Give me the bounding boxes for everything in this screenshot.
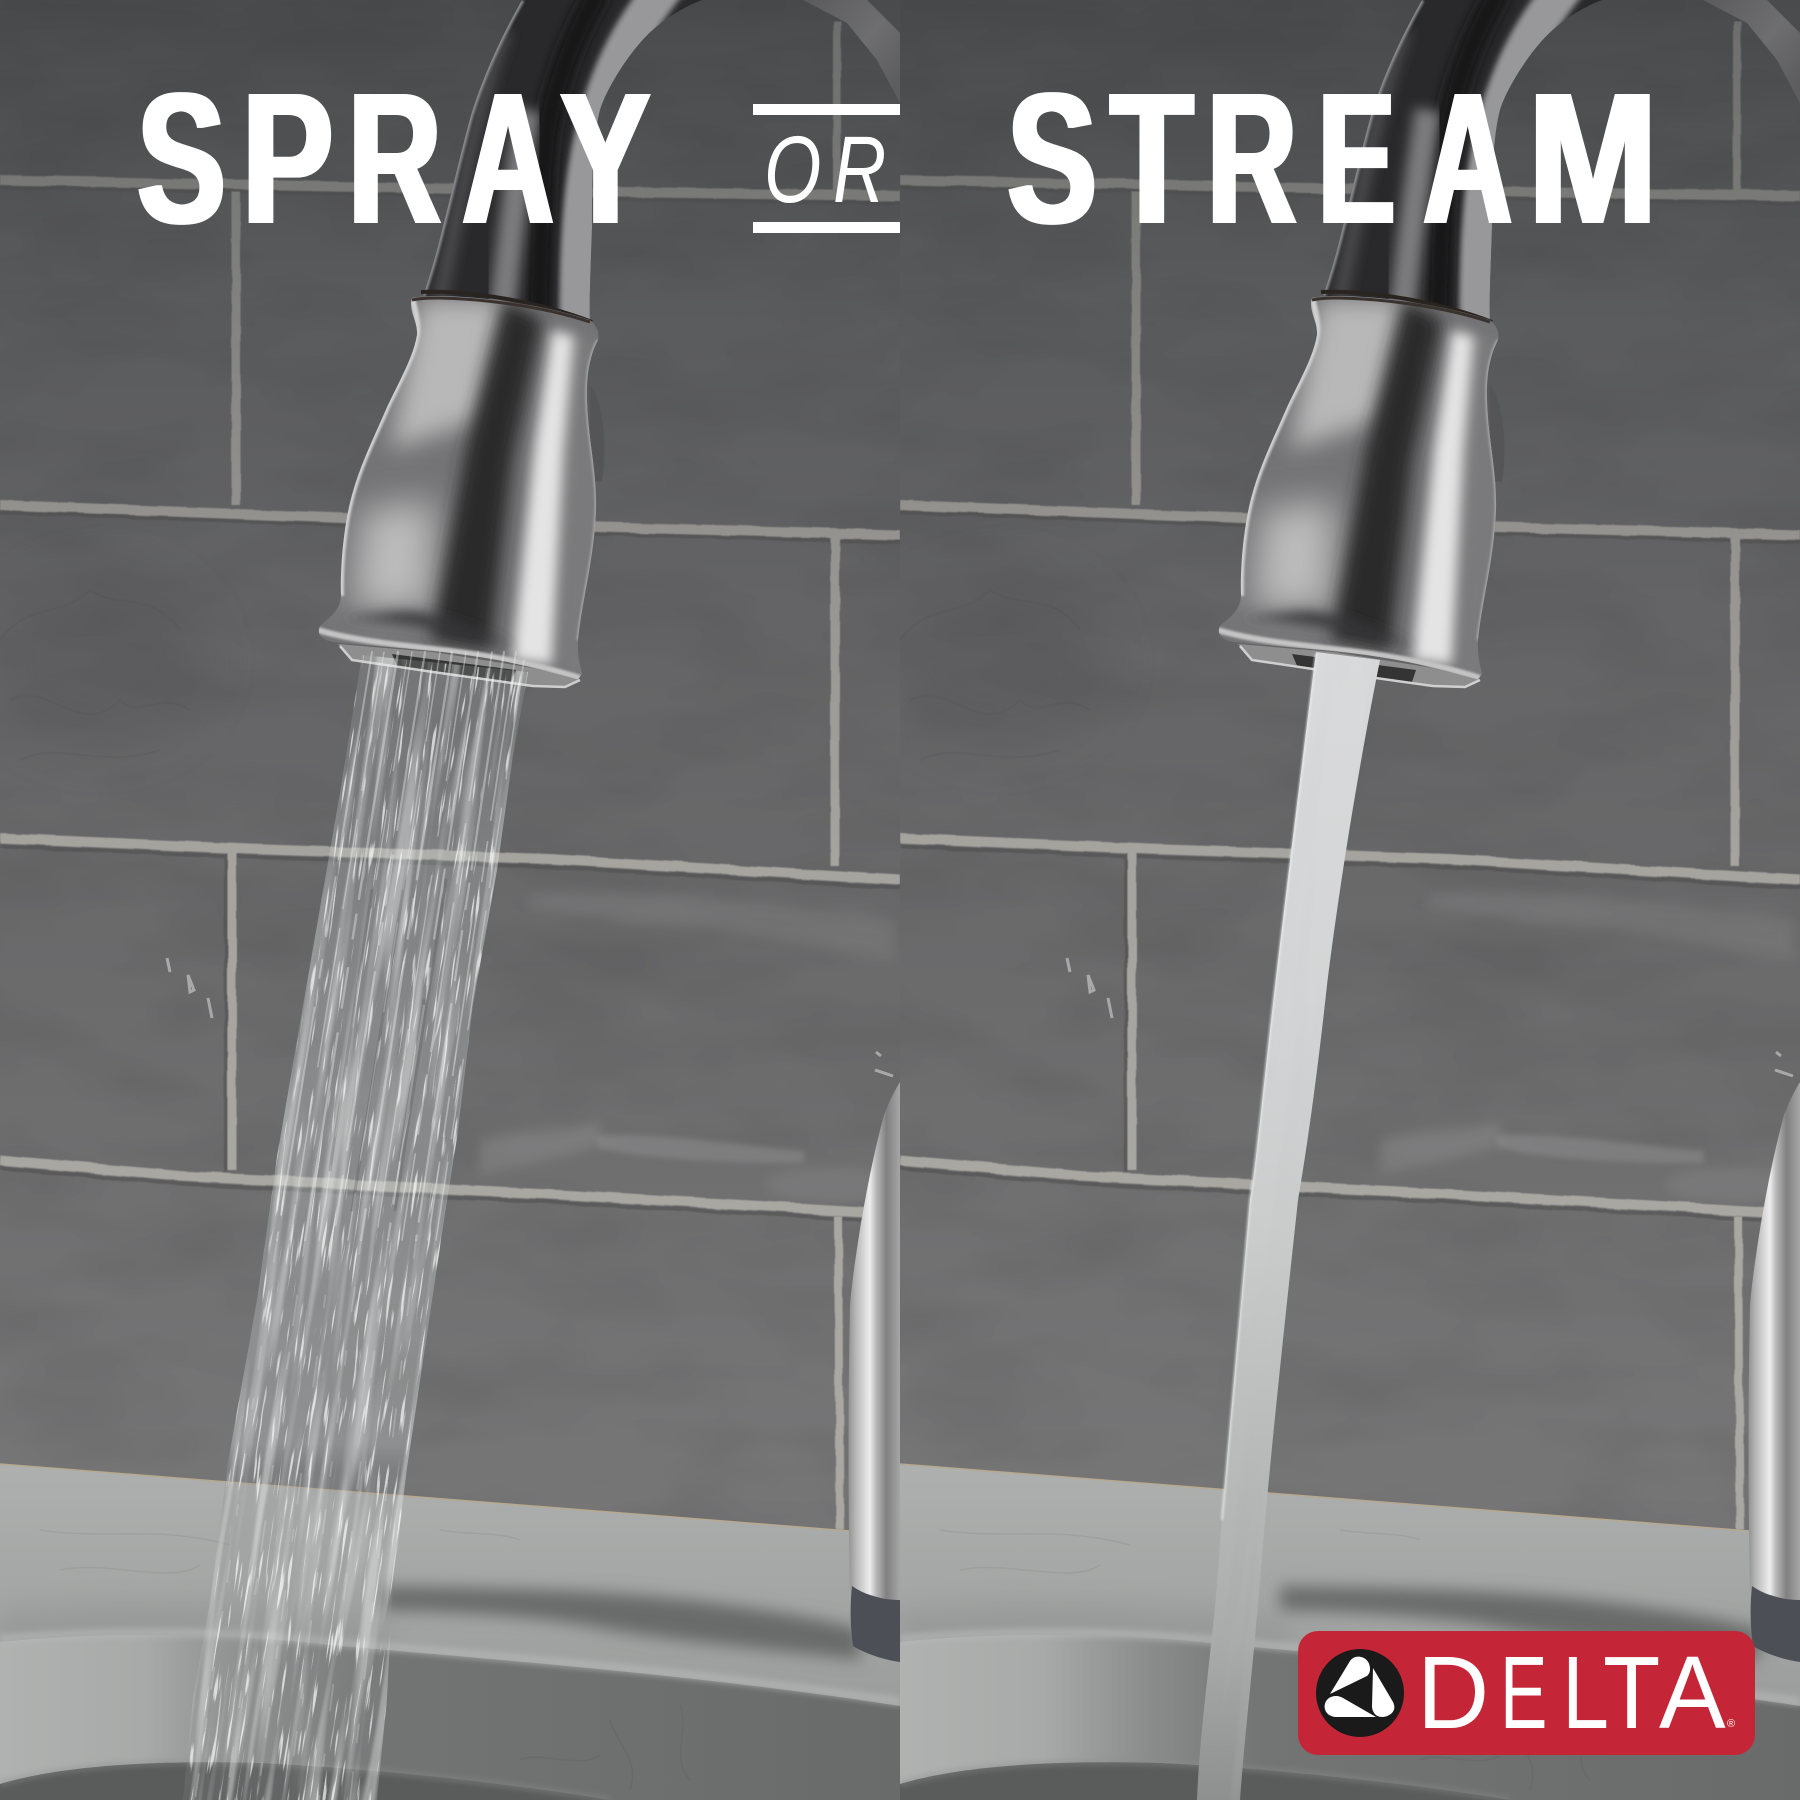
sink bowl [0, 1633, 900, 1800]
heading: spray: S [136, 53, 225, 263]
spray water [183, 650, 528, 1800]
heading: spray: R [348, 53, 441, 263]
faucet neck [421, 0, 900, 330]
logo wordmark [1417, 1635, 1735, 1750]
heading: stream: S [1006, 53, 1097, 263]
logo wordmark: L [1562, 1635, 1608, 1750]
or divider [753, 104, 900, 233]
heading: stream: E [1318, 53, 1395, 263]
faucet handle stem [848, 1082, 900, 1662]
heading: stream: A [1422, 53, 1512, 263]
logo wordmark: E [1500, 1635, 1547, 1750]
heading: spray [136, 53, 651, 263]
spray head nozzle [318, 296, 600, 690]
logo wordmark: A [1659, 1635, 1726, 1750]
logo wordmark: D [1417, 1635, 1489, 1750]
countertop [0, 1464, 900, 1800]
tile wall [0, 0, 900, 1800]
grout lines [0, 22, 900, 1530]
aerator [338, 644, 580, 687]
heading: stream: R [1207, 53, 1297, 263]
heading: stream: M [1528, 53, 1658, 263]
heading: spray: Y [560, 53, 650, 263]
spray head trigger [590, 385, 604, 482]
brand badge: Delta [1298, 1631, 1755, 1755]
stream water [1197, 652, 1380, 1800]
heading: stream: T [1110, 53, 1193, 263]
logo wordmark: ® [1727, 1718, 1735, 1730]
heading: stream [1006, 53, 1658, 263]
icon: Delta triangle mark [1316, 1649, 1404, 1737]
panel: spray [0, 0, 900, 1800]
logo wordmark: T [1603, 1635, 1660, 1750]
panel: stream [890, 0, 1800, 1800]
heading: spray: A [462, 53, 554, 263]
or divider: OR [764, 116, 886, 222]
tile wall, faucet and counter [890, 0, 1800, 1800]
heading: spray: P [242, 53, 334, 263]
